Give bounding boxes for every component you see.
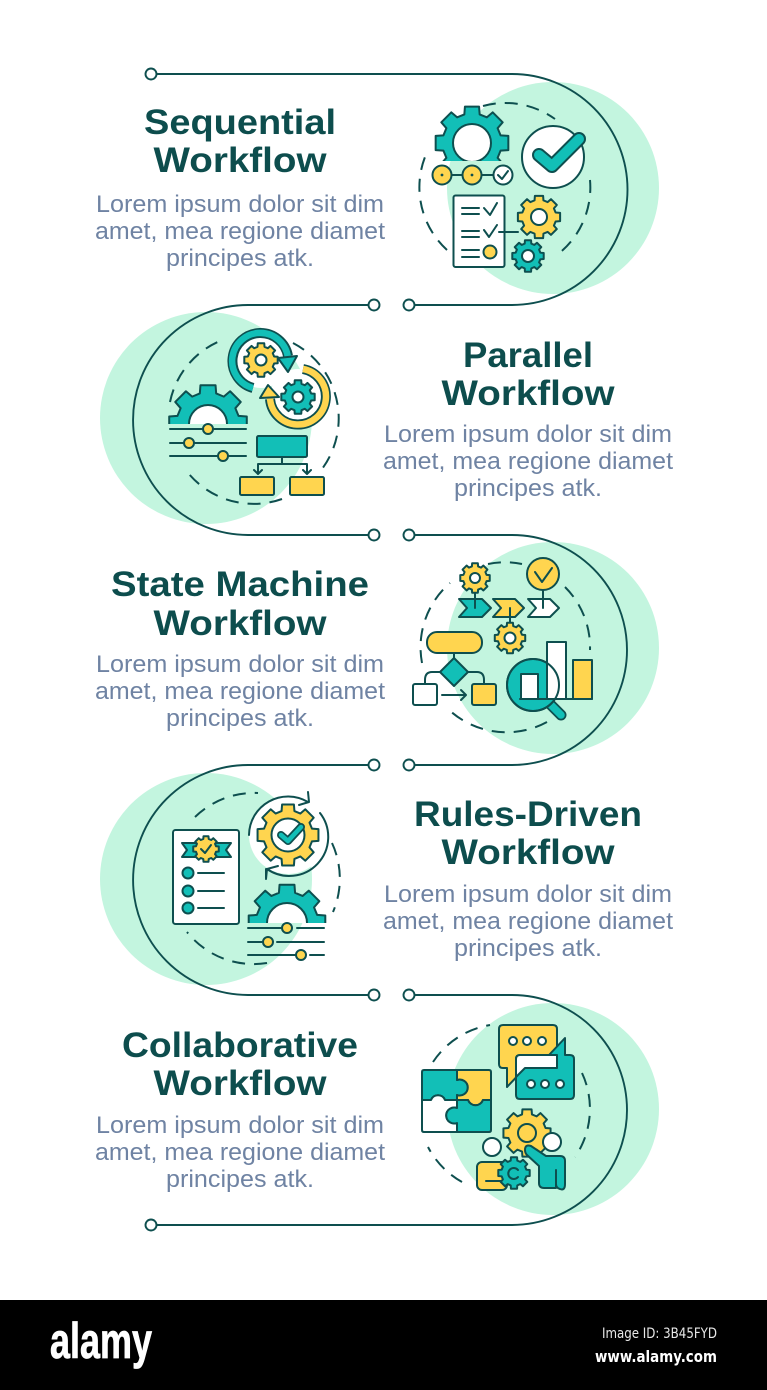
connector node 5 top [404, 990, 414, 1000]
puzzle [422, 1070, 491, 1132]
text block 1: principes atk. [166, 245, 314, 272]
heading: state machine workflow [111, 565, 369, 643]
heading: parallel workflow: Workflow [442, 374, 615, 413]
sliders [170, 424, 246, 461]
heading: rules-driven workflow: Rules-Driven [414, 795, 642, 834]
flow chart [240, 436, 324, 495]
connector node 2 bottom [368, 530, 380, 540]
connector node 2 top [368, 300, 380, 310]
panel: parallel workflow [100, 300, 673, 540]
heading: parallel workflow: Parallel [463, 336, 593, 375]
heading: sequential workflow [144, 103, 336, 180]
panel: state machine workflow [95, 530, 659, 770]
text block 5: amet, mea regione diamet [95, 1139, 385, 1166]
process chevrons [459, 588, 559, 625]
text block 1: amet, mea regione diamet [95, 218, 385, 245]
icon: rules-driven workflow [173, 792, 340, 964]
connector node start [146, 68, 156, 80]
heading: sequential workflow: Workflow [154, 141, 327, 180]
text block 2: Lorem ipsum dolor sit dim [384, 421, 672, 448]
gear teal [512, 240, 544, 272]
icon: collaborative workflow [422, 1025, 590, 1190]
text block 3: Lorem ipsum dolor sit dim [96, 651, 384, 678]
mint circle 5 [447, 1003, 659, 1215]
heading: collaborative workflow: Workflow [154, 1064, 327, 1103]
heading: state machine workflow: Workflow [154, 604, 327, 643]
footer band [0, 1300, 767, 1390]
gear yellow [244, 343, 278, 377]
gear yellow [503, 1109, 551, 1157]
check pin [527, 558, 559, 590]
text block 3: principes atk. [166, 705, 314, 732]
person right [525, 1133, 565, 1189]
panel: rules-driven workflow [100, 760, 673, 1000]
half gear [248, 884, 326, 923]
heading: collaborative workflow: Collaborative [122, 1026, 358, 1065]
connector line 5 [156, 995, 627, 1225]
chat bubbles [499, 1025, 574, 1099]
panel: collaborative workflow [95, 990, 659, 1230]
text block 1 [95, 191, 385, 272]
text block 3: amet, mea regione diamet [95, 678, 385, 705]
half gear [434, 106, 510, 161]
text block 2: amet, mea regione diamet [383, 448, 673, 475]
connector node 4 bottom [368, 990, 380, 1000]
text block 1: Lorem ipsum dolor sit dim [96, 191, 384, 218]
rotating gear with check [249, 792, 328, 879]
heading: sequential workflow: Sequential [144, 103, 336, 142]
check badge [522, 126, 584, 188]
alamy logo: alamy [50, 1313, 152, 1369]
connector node 1 end [404, 300, 414, 310]
website: www.alamy.com [595, 1347, 717, 1366]
checklist [454, 196, 518, 267]
connector node 4 top [368, 760, 380, 770]
heading: rules-driven workflow: Workflow [442, 833, 615, 872]
image id: Image ID: 3B45FYD [602, 1326, 717, 1342]
gear bottom [495, 623, 525, 653]
text block 5: Lorem ipsum dolor sit dim [96, 1112, 384, 1139]
connector node 3 bottom [404, 760, 414, 770]
text block 4: principes atk. [454, 935, 602, 962]
icon: parallel workflow [169, 332, 339, 504]
mint circle 3 [447, 542, 659, 754]
gear top [460, 563, 490, 593]
icon: state machine workflow [413, 558, 592, 732]
heading: state machine workflow: State Machine [111, 565, 369, 604]
magnifier and bars [507, 642, 592, 715]
connector line 1 [156, 74, 628, 305]
half gear [168, 384, 248, 424]
connector node 3 top [404, 530, 414, 540]
mint circle 4 [100, 773, 312, 985]
connector line 4 [133, 765, 369, 995]
mint circle 1 [447, 82, 659, 294]
connector line 2 [133, 305, 369, 535]
certificate document [173, 830, 239, 924]
gear teal [281, 380, 315, 414]
icon: sequential workflow [419, 103, 590, 272]
decision flow [413, 632, 496, 705]
text block 3 [95, 651, 385, 732]
panel: sequential workflow [95, 68, 659, 310]
connector line 3 [414, 535, 627, 765]
heading: parallel workflow [442, 336, 615, 413]
heading: collaborative workflow [122, 1026, 358, 1103]
text block 5 [95, 1112, 385, 1193]
text block 2 [383, 421, 673, 502]
connector node end [146, 1220, 156, 1230]
text block 2: principes atk. [454, 475, 602, 502]
mint circle 2 [100, 312, 312, 524]
gear teal [498, 1157, 530, 1189]
rotating arrows [232, 332, 326, 425]
gear yellow [518, 196, 560, 238]
text block 4: amet, mea regione diamet [383, 908, 673, 935]
sliders [248, 923, 324, 960]
text block 4 [383, 881, 673, 962]
heading: rules-driven workflow [414, 795, 642, 872]
text block 4: Lorem ipsum dolor sit dim [384, 881, 672, 908]
step chain [432, 166, 512, 184]
person left [477, 1138, 507, 1190]
text block 5: principes atk. [166, 1166, 314, 1193]
